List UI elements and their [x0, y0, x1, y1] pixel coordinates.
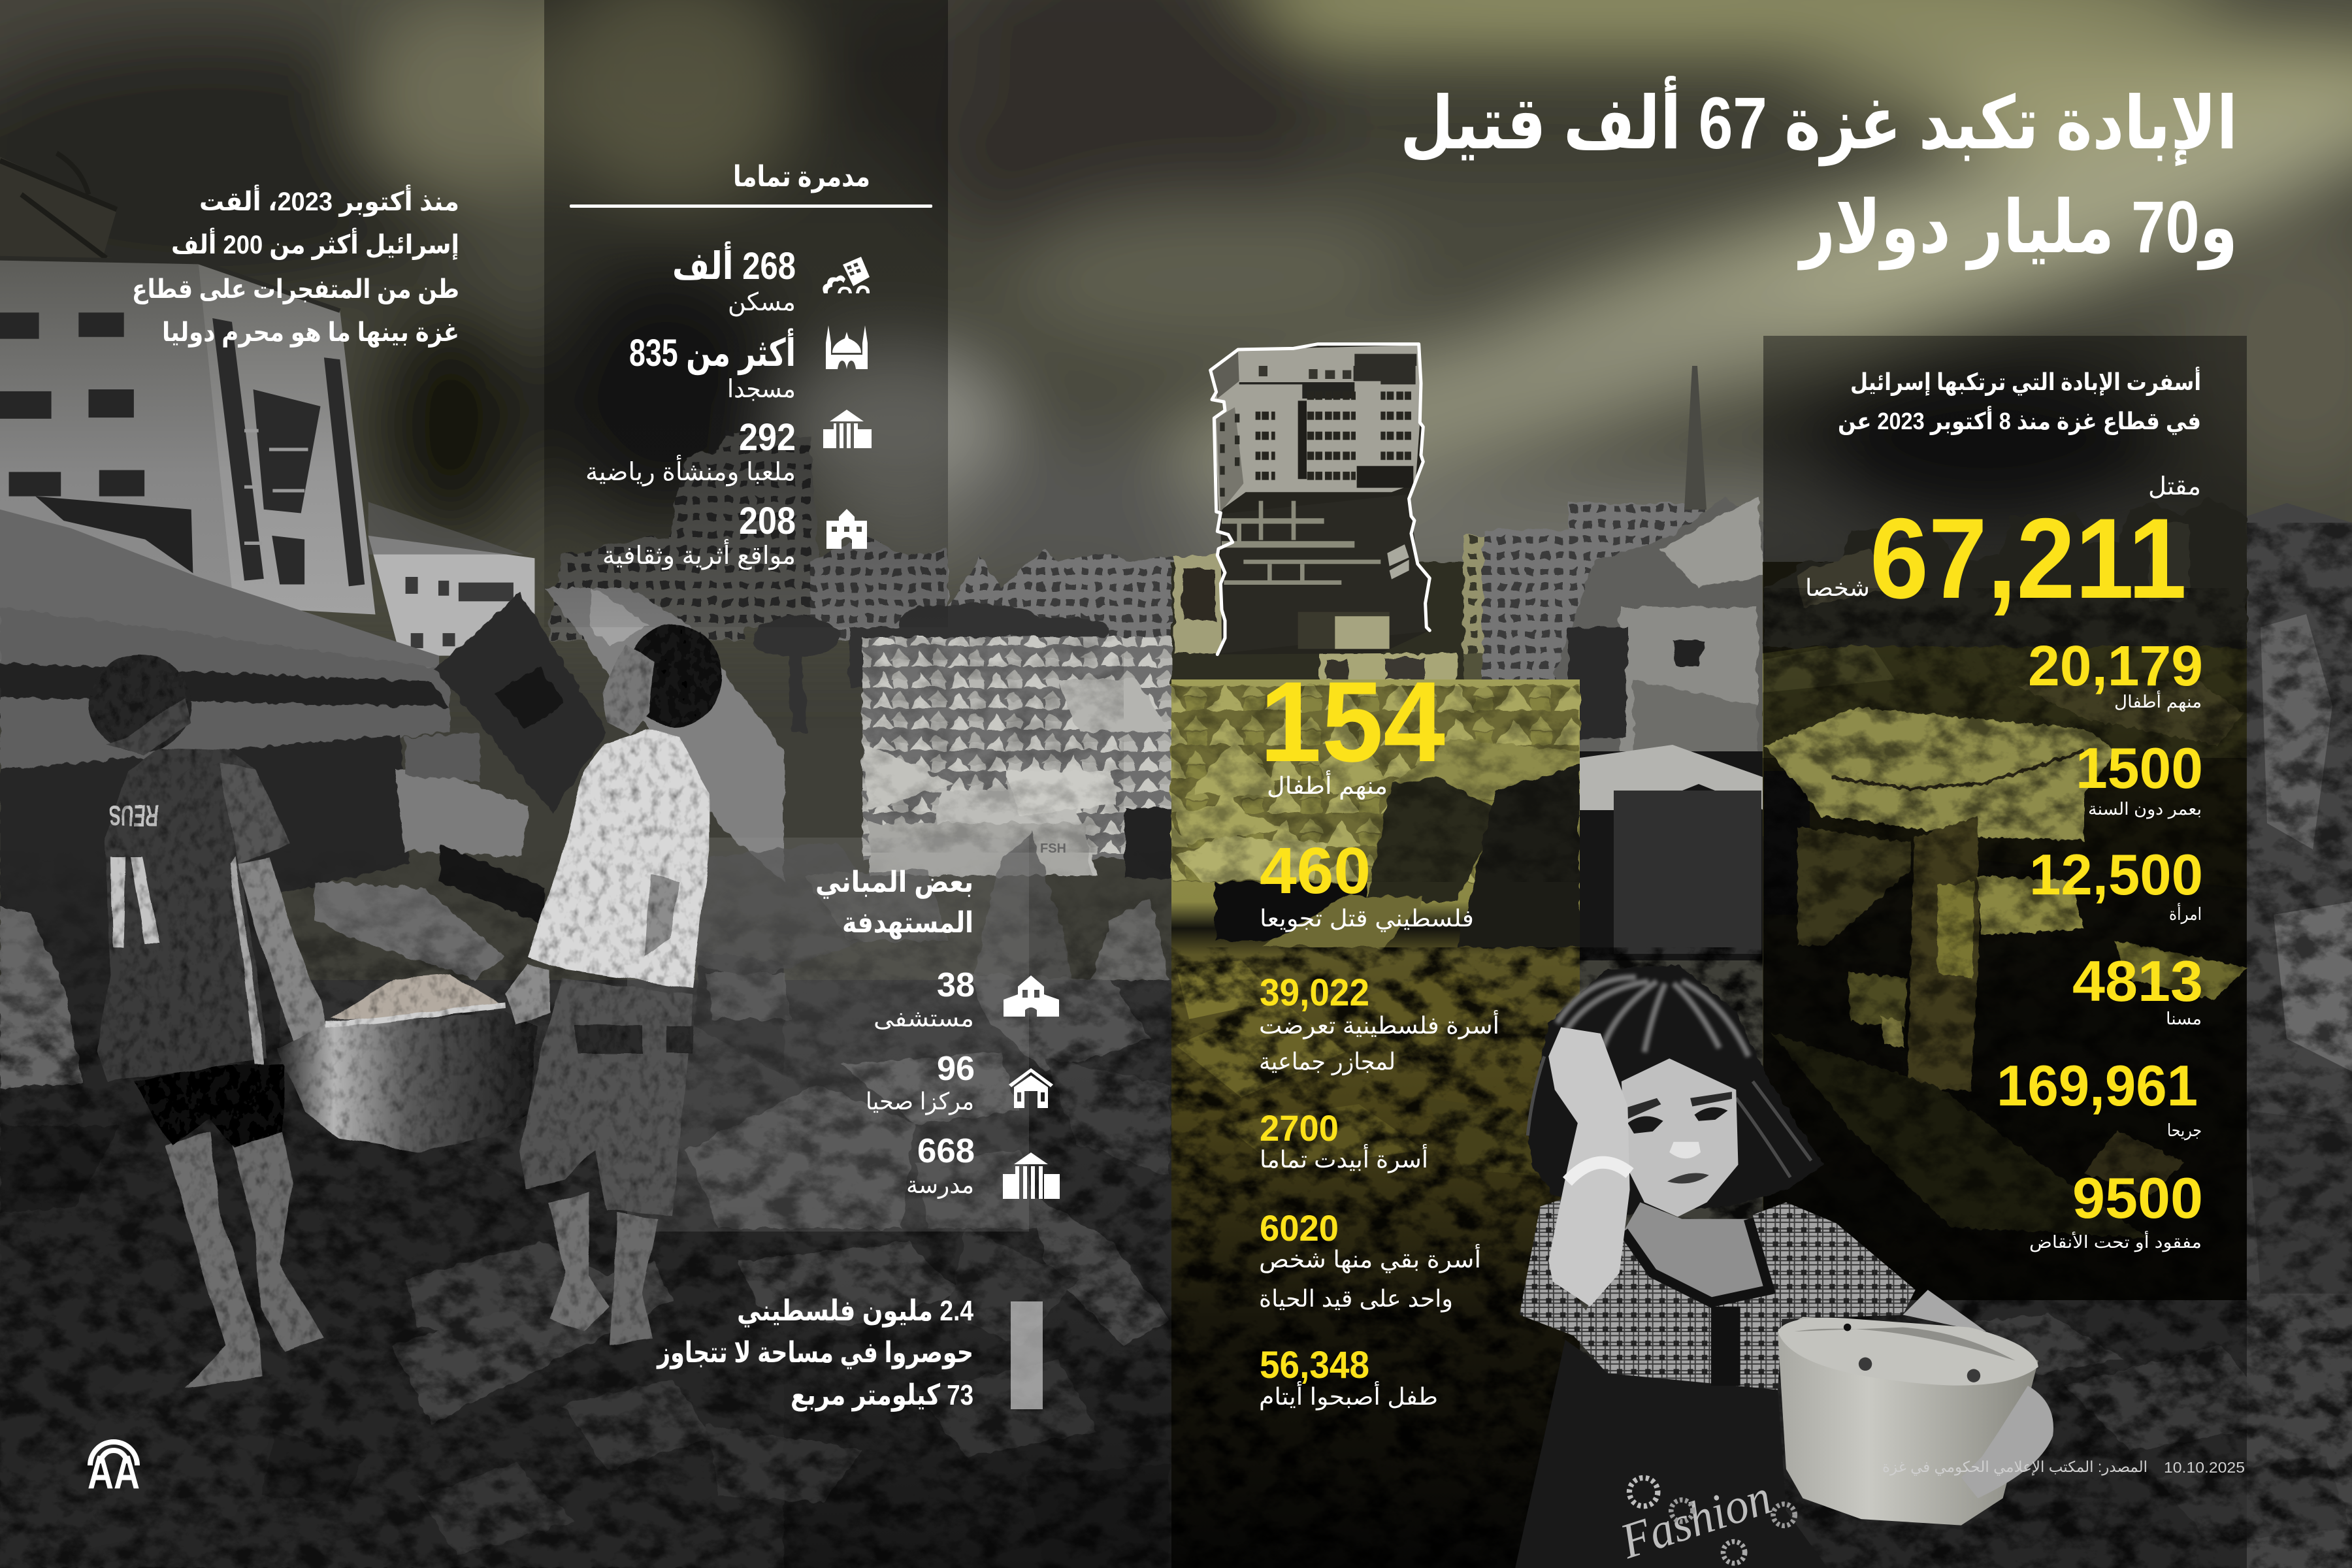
- stat: heritage sites: 208: [739, 500, 796, 542]
- stat: families massacred: [1259, 972, 1499, 1075]
- stat: families erased: أسرة أبيدت تماما: [1260, 1144, 1428, 1173]
- stat: missing: [2029, 1166, 2203, 1252]
- dress lower: [1515, 1340, 1828, 1568]
- panel heading: بعض المباني: [815, 866, 973, 899]
- stat: heritage sites: [602, 500, 796, 570]
- panel: families and children: [1259, 659, 1499, 1411]
- dress top pattern: [1520, 1198, 1916, 1390]
- panel intro: في قطاع غزة منذ 8 أكتوبر 2023 عن: [1838, 406, 2201, 435]
- stat: sports facilities: [585, 416, 796, 487]
- stat: elderly: مسنا: [2166, 1009, 2202, 1028]
- left building in ruins: [0, 153, 534, 719]
- texture inside casualties panel: [1763, 588, 2247, 1300]
- stat: mosques: مسجدا: [727, 376, 796, 403]
- callout: population in area: [656, 1295, 973, 1412]
- stat: families erased: [1260, 1107, 1428, 1173]
- tent label: FSH: [1040, 841, 1066, 856]
- stat: orphans: [1259, 1344, 1438, 1411]
- panel heading: المستهدفة: [842, 907, 973, 939]
- hair: [1527, 965, 1823, 1215]
- left boy: REUS: [109, 799, 159, 831]
- communications mast: [1684, 366, 1707, 510]
- stat: wounded: جريحا: [2167, 1120, 2202, 1141]
- stat: homes: [672, 241, 796, 317]
- stat: children figure: 154: [1260, 659, 1445, 786]
- stat: single survivor: 6020: [1260, 1207, 1339, 1249]
- stat: infants: بعمر دون السنة: [2088, 799, 2202, 819]
- stat: families massacred: أسرة فلسطينية تعرضت: [1259, 1010, 1499, 1039]
- source and date: 10.10.2025: [2164, 1459, 2245, 1476]
- stat: mosques: أكثر من 835: [629, 328, 796, 376]
- icon: mosque: [826, 325, 868, 369]
- stat: schools: [906, 1132, 975, 1199]
- stat: schools: 668: [917, 1132, 975, 1170]
- icon: heritage building: [826, 509, 867, 549]
- grey buildings right of tower: [1483, 497, 1764, 758]
- stat: homes: 268 ألف: [672, 241, 796, 287]
- destroyed tower with white outline: [1211, 344, 1429, 655]
- icon: gaza strip bar: [1011, 1301, 1043, 1409]
- stat: children: 20,179: [2028, 634, 2203, 698]
- arm and hand on head: [1548, 1027, 1630, 1307]
- white outline of the tower: [1211, 344, 1429, 655]
- text block: intro on explosives: طن من المتفجرات على قطاع: [132, 275, 459, 304]
- stat: single survivor: واحد على قيد الحياة: [1259, 1285, 1453, 1313]
- stat: families erased: 2700: [1260, 1107, 1339, 1149]
- text block: intro on explosives: إسرائيل أكثر من 200 ألف: [171, 227, 459, 260]
- photo: girl holding a pot: [1515, 965, 2053, 1568]
- stat: schools: مدرسة: [906, 1171, 974, 1199]
- stat: heritage sites: مواقع أثرية وثقافية: [602, 539, 796, 570]
- tents inside casualties panel: [1764, 680, 2247, 1238]
- icon: collapsing building: [823, 257, 870, 293]
- arm behind pot: [1903, 1290, 1986, 1331]
- stat: families massacred: 39,022: [1260, 972, 1369, 1014]
- olive area inside statistics panel: [1763, 562, 2247, 1300]
- text block: intro on explosives: منذ أكتوبر 2023، ألقت: [199, 184, 459, 217]
- stat: infants: 1500: [2076, 736, 2203, 800]
- stat: homes: مسكن: [728, 289, 796, 317]
- stat: hospitals: 38: [937, 966, 975, 1004]
- slab and dark void behind boys: [0, 588, 784, 1568]
- rubble stones: [0, 832, 2352, 1568]
- callout: population in area: 2.4 مليون فلسطيني: [737, 1295, 973, 1328]
- metal basin: [278, 974, 537, 1152]
- panel heading: [815, 866, 973, 939]
- stat: health centres: مركزا صحيا: [866, 1088, 974, 1115]
- dress print: Fashion: [1613, 1469, 1778, 1568]
- stat: missing: 9500: [2072, 1166, 2203, 1230]
- icon: school: [1003, 1152, 1060, 1199]
- panel backdrop: targeted buildings: [627, 838, 1029, 1232]
- stat: killed: شخصا: [1805, 574, 1870, 601]
- title: و70 مليار دولار: [1797, 186, 2238, 270]
- stat: killed: 67,211: [1870, 495, 2187, 623]
- source and date: المصدر: المكتب الإعلامي الحكومي في غزة: [1882, 1458, 2148, 1476]
- stat: orphans: طفل أصبحوا أيتام: [1259, 1381, 1438, 1411]
- title: [1400, 76, 2238, 270]
- logo: Anadolu Agency: AA: [88, 1446, 140, 1499]
- stat: starvation: فلسطيني قتل تجويعا: [1260, 905, 1474, 932]
- metal pot: [1778, 1317, 2038, 1526]
- stat: missing: مفقود أو تحت الأنقاض: [2029, 1230, 2202, 1252]
- panel: targeted buildings: [815, 866, 1060, 1199]
- callout: population in area: حوصروا في مساحة لا تتجاوز: [656, 1337, 973, 1369]
- olive tent camp and rubble: [1171, 679, 1580, 1568]
- stat: hospitals: مستشفى: [874, 1005, 974, 1032]
- title: الإبادة تكبد غزة 67 ألف قتيل: [1400, 76, 2238, 167]
- text block: intro on explosives: غزة بينها ما هو محرم دوليا: [162, 318, 459, 348]
- stat: starvation: 460: [1260, 834, 1371, 907]
- stat: health centres: 96: [937, 1050, 975, 1088]
- stat: orphans: 56,348: [1260, 1344, 1369, 1386]
- chest: [1624, 1202, 1769, 1300]
- stat: children figure: منهم أطفال: [1267, 770, 1388, 800]
- stat: wounded: 169,961: [1997, 1053, 2198, 1118]
- stat: sports facilities: 292: [739, 416, 796, 459]
- far buildings grey: [549, 431, 1176, 653]
- stat: starvation: [1260, 834, 1474, 932]
- right boy: [505, 625, 722, 1345]
- photo: two boys carrying a basin: [89, 625, 722, 1387]
- stat: killed: [1805, 473, 2201, 623]
- hand on pot: [1961, 1386, 2053, 1498]
- panel backdrop: destroyed completely: [544, 0, 948, 627]
- rubble texture: [0, 523, 2352, 1568]
- stat: sports facilities: ملعبا ومنشأة رياضية: [585, 455, 796, 487]
- ground rubble left: [0, 503, 2352, 1568]
- icon: health centre: [1009, 1068, 1053, 1108]
- stat: women: امرأة: [2169, 902, 2202, 924]
- stat: killed: مقتل: [2148, 473, 2201, 500]
- callout: population in area: 73 كيلومتر مربع: [791, 1379, 973, 1412]
- heading rule: [570, 204, 932, 208]
- face: [1622, 1058, 1738, 1217]
- stat: elderly: 4813: [2072, 949, 2203, 1013]
- left boy: [89, 655, 327, 1387]
- street trees: [753, 604, 1111, 732]
- stat: women: 12,500: [2029, 842, 2203, 907]
- building silhouettes inside casualties panel: [1763, 497, 2247, 647]
- text block: intro on explosives: [132, 184, 459, 348]
- panel: casualties: [1805, 367, 2203, 1252]
- olive tower-side buildings: [1171, 536, 1596, 732]
- stat: mosques: [629, 328, 796, 403]
- stat: children: منهم أطفال: [2114, 690, 2202, 712]
- panel: destroyed completely: [570, 161, 932, 570]
- stat: health centres: [866, 1050, 975, 1115]
- panel backdrop: casualties: [1763, 336, 2247, 1300]
- grey tent band: [1580, 745, 1764, 960]
- icon: institution: [823, 410, 872, 448]
- stat: families massacred: لمجازر جماعية: [1259, 1048, 1396, 1075]
- stat: single survivor: [1259, 1207, 1481, 1313]
- stat: hospitals: [874, 966, 975, 1032]
- panel intro: [1838, 367, 2201, 435]
- stat: single survivor: أسرة بقي منها شخص: [1259, 1244, 1481, 1273]
- icon: hospital: [1004, 975, 1059, 1017]
- panel intro: أسفرت الإبادة التي ترتكبها إسرائيل: [1850, 367, 2201, 396]
- gray tent camp: [862, 637, 1175, 879]
- panel heading: مدمرة تماما: [733, 161, 870, 193]
- sky and smoke clouds: [0, 0, 2352, 653]
